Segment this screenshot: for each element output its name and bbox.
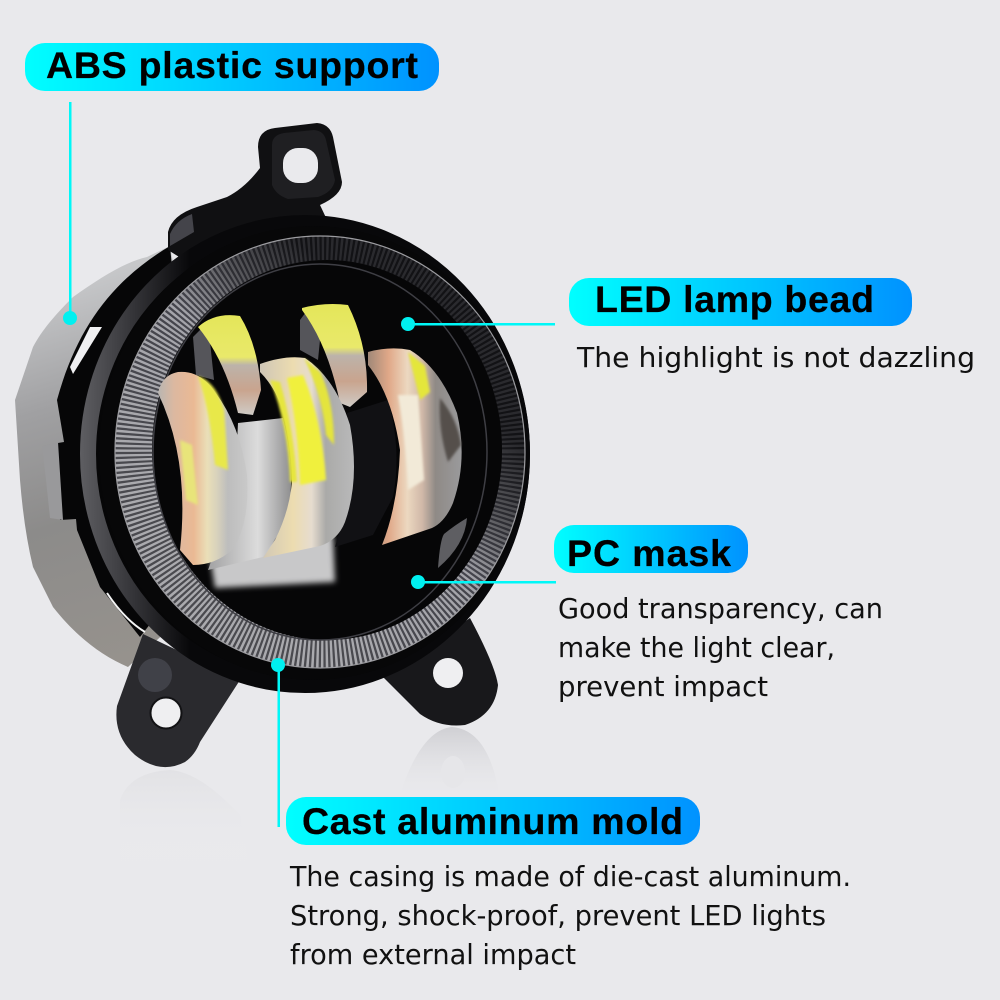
side connector [42, 442, 63, 520]
bezel grey band [88, 223, 522, 685]
heading: PC mask [567, 532, 731, 574]
pointer line [69, 102, 72, 318]
ring highlight edge [115, 236, 525, 668]
rear flange [52, 246, 200, 637]
top mounting tab [168, 123, 342, 270]
description: The casing is made of die-cast aluminum. [289, 860, 851, 893]
bottom right tab [383, 618, 498, 726]
fog lamp product [15, 123, 530, 768]
ring base [116, 236, 520, 668]
middle lens broad yellow [287, 375, 326, 485]
silver reflection lower right [438, 518, 467, 568]
description: Strong, shock-proof, prevent LED lights [290, 899, 826, 932]
top tab inner face [272, 130, 335, 199]
label pill [286, 797, 700, 845]
description: Good transparency, can [558, 592, 883, 625]
glass edge [115, 236, 525, 668]
ring ridges [133, 248, 513, 654]
description: from external impact [290, 938, 576, 971]
flange highlight [107, 593, 145, 632]
left lens yellow strip [198, 376, 228, 470]
middle lens top yellow [304, 358, 334, 445]
right lens yellow [408, 352, 430, 400]
middle lens [260, 357, 354, 558]
label pill [25, 43, 439, 91]
description: The highlight is not dazzling [576, 341, 975, 374]
upper right lens bracket [300, 312, 320, 360]
pointer line [408, 323, 555, 326]
bottom right tab hole [433, 658, 463, 688]
bottom left tab hole [150, 698, 182, 728]
pointer dot [401, 317, 415, 331]
label pill [554, 525, 748, 573]
label pill [569, 278, 912, 326]
callout: ABS plastic support [25, 43, 439, 325]
housing slot [70, 327, 102, 374]
pointer line [278, 665, 280, 827]
left lens [158, 372, 247, 565]
upper left lens bracket [193, 322, 214, 380]
upper left lens [198, 315, 261, 415]
left knob highlight [170, 214, 194, 246]
aluminum housing [15, 246, 200, 667]
tab reflections [120, 727, 500, 870]
description: make the light clear, [558, 631, 835, 664]
lens face [152, 260, 502, 640]
black cylinder [335, 400, 397, 547]
inner thin line [153, 264, 487, 640]
left lens yellow strip lower [180, 440, 198, 505]
upper right lens [302, 304, 367, 407]
right lens [368, 348, 462, 545]
heading: LED lamp bead [595, 278, 874, 320]
bottom left tab [116, 634, 240, 767]
description [558, 592, 883, 703]
top tab hole [283, 148, 318, 183]
tab bump [138, 658, 172, 692]
pointer line [418, 581, 556, 584]
callout: Cast aluminum mold [271, 658, 851, 971]
outer bezel [80, 217, 530, 691]
pointer dot [271, 658, 285, 672]
inner black band [99, 226, 527, 680]
callout: LED lamp bead [401, 278, 975, 374]
description [289, 860, 851, 971]
knurled ring [116, 236, 524, 668]
heading: Cast aluminum mold [302, 800, 683, 842]
description: prevent impact [558, 670, 768, 703]
middle lens narrow yellow [270, 380, 297, 482]
callout: PC mask [411, 525, 883, 703]
lower glow [208, 535, 335, 588]
pointer dot [411, 575, 425, 589]
right lens bright strip [398, 395, 424, 490]
heading: ABS plastic support [46, 44, 418, 86]
pointer dot [63, 311, 77, 325]
right lens eye reflection [440, 398, 461, 462]
grey cylinder [208, 418, 291, 570]
